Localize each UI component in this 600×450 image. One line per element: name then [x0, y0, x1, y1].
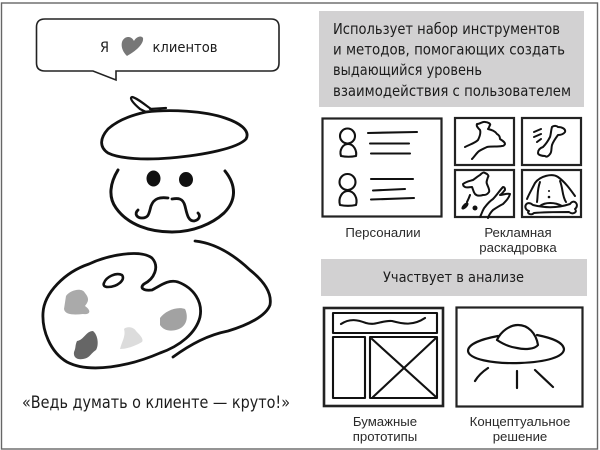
panel: storyboard — [455, 118, 581, 218]
face — [111, 170, 234, 232]
panel: personas — [322, 118, 442, 216]
caption: storyboard: раскадровка — [479, 240, 557, 255]
caption: concept: Концептуальное — [470, 414, 570, 429]
bubble text: clients: клиентов — [152, 40, 218, 56]
prototype sidebar — [333, 337, 365, 398]
caption: paper prototypes — [353, 414, 417, 444]
panel: concept — [456, 308, 582, 406]
panel: description: и методов, помогающих создать — [333, 40, 565, 58]
palette outline — [43, 254, 201, 368]
panel: description: выдающийся уровень — [333, 61, 482, 79]
mustache — [136, 198, 199, 221]
caption: concept — [470, 414, 570, 444]
icon: flying saucer — [468, 325, 564, 388]
eyes — [146, 170, 160, 186]
caption: storyboard — [479, 225, 557, 255]
panel: paper prototypes — [324, 308, 443, 406]
frame: bone — [522, 118, 581, 165]
quote: «Ведь думать о клиенте — круто!» — [22, 393, 290, 413]
icon: heart — [122, 37, 143, 56]
paint: light blob — [120, 327, 143, 349]
character: artist — [102, 97, 247, 232]
frame: dog and hand — [455, 170, 514, 218]
beret stem — [131, 97, 166, 112]
paint: dark blob — [74, 331, 98, 359]
palette thumb hole — [104, 274, 123, 287]
panel: analysis — [321, 259, 587, 296]
beret — [102, 111, 247, 159]
panel: analysis: Участвует в анализе — [383, 270, 524, 286]
caption: concept: решение — [493, 429, 547, 444]
caption: storyboard: Рекламная — [484, 225, 552, 240]
panel: description — [319, 11, 584, 107]
frame: dog with bone — [522, 170, 581, 217]
caption: paper prototypes: Бумажные — [353, 414, 417, 429]
prototype wavy line — [341, 318, 425, 324]
paint: mid grey blob — [160, 308, 187, 331]
bubble text: I: Я — [100, 40, 109, 56]
persona 2 — [339, 174, 414, 206]
hand — [173, 241, 270, 357]
caption: personas: Персоналии — [345, 225, 421, 240]
prototype image placeholder — [370, 337, 437, 398]
caption: paper prototypes: прототипы — [353, 429, 417, 444]
panel: description: взаимодействия с пользователем — [333, 82, 571, 100]
paint: grey blob — [64, 290, 89, 314]
panel: description: Использует набор инструментов — [333, 20, 560, 38]
frame: hand with bone — [455, 118, 514, 165]
persona 1 — [340, 128, 417, 157]
speech bubble — [36, 19, 279, 80]
palette — [43, 241, 270, 368]
prototype header — [333, 313, 437, 333]
